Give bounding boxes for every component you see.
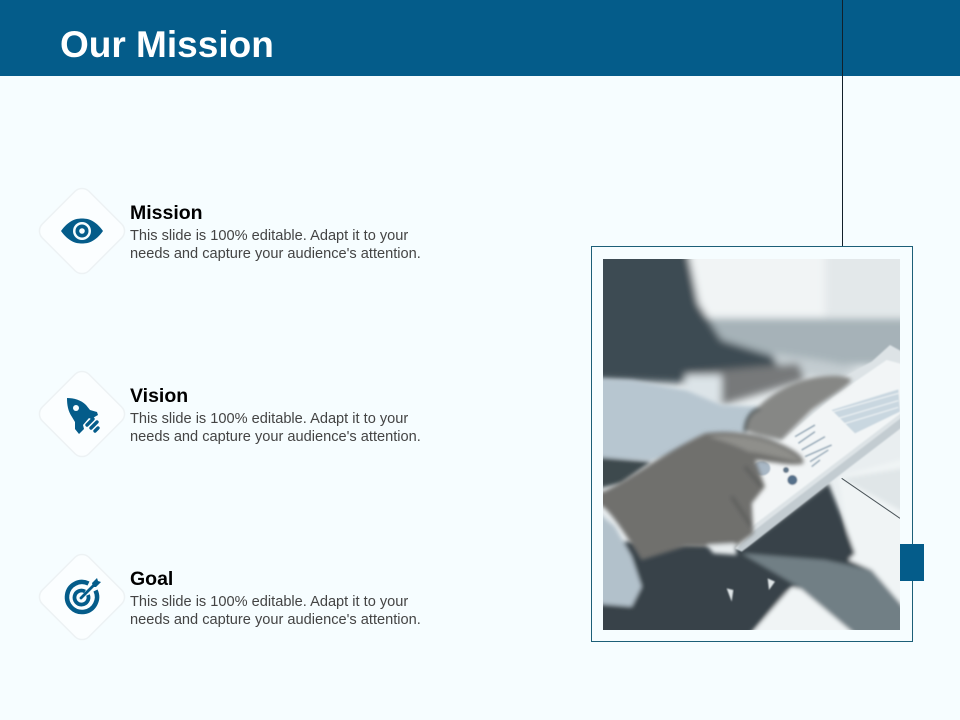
header band [0, 0, 960, 76]
heading: Vision [130, 385, 188, 407]
item: mission [39, 188, 421, 274]
text block: needs and capture your audience's attention. [130, 246, 421, 262]
text block: needs and capture your audience's attention. [130, 612, 421, 628]
text block: This slide is 100% editable. Adapt it to your [130, 411, 408, 427]
photo frame [591, 246, 913, 642]
text block: needs and capture your audience's attention. [130, 429, 421, 445]
icon: target in diamond [39, 554, 125, 640]
photo: hands using a tablet [603, 259, 900, 630]
icon: rocket in diamond [39, 371, 125, 457]
item: vision [39, 371, 421, 457]
text block: This slide is 100% editable. Adapt it to your [130, 228, 408, 244]
hands [592, 376, 852, 560]
title: Our Mission [60, 24, 274, 65]
text block: This slide is 100% editable. Adapt it to your [130, 594, 408, 610]
highlights on bottom sleeve [768, 578, 775, 590]
accent square [900, 544, 924, 581]
text block [130, 594, 421, 628]
table right and dark lower area [751, 478, 900, 630]
icon: eye in diamond [39, 188, 125, 274]
vertical connector line [842, 0, 843, 247]
item: goal [39, 554, 421, 640]
tablet [735, 345, 905, 552]
shirt sleeve [592, 378, 758, 460]
heading: Mission [130, 202, 203, 224]
heading: Goal [130, 568, 173, 590]
text block [130, 228, 421, 262]
text block [130, 411, 421, 445]
